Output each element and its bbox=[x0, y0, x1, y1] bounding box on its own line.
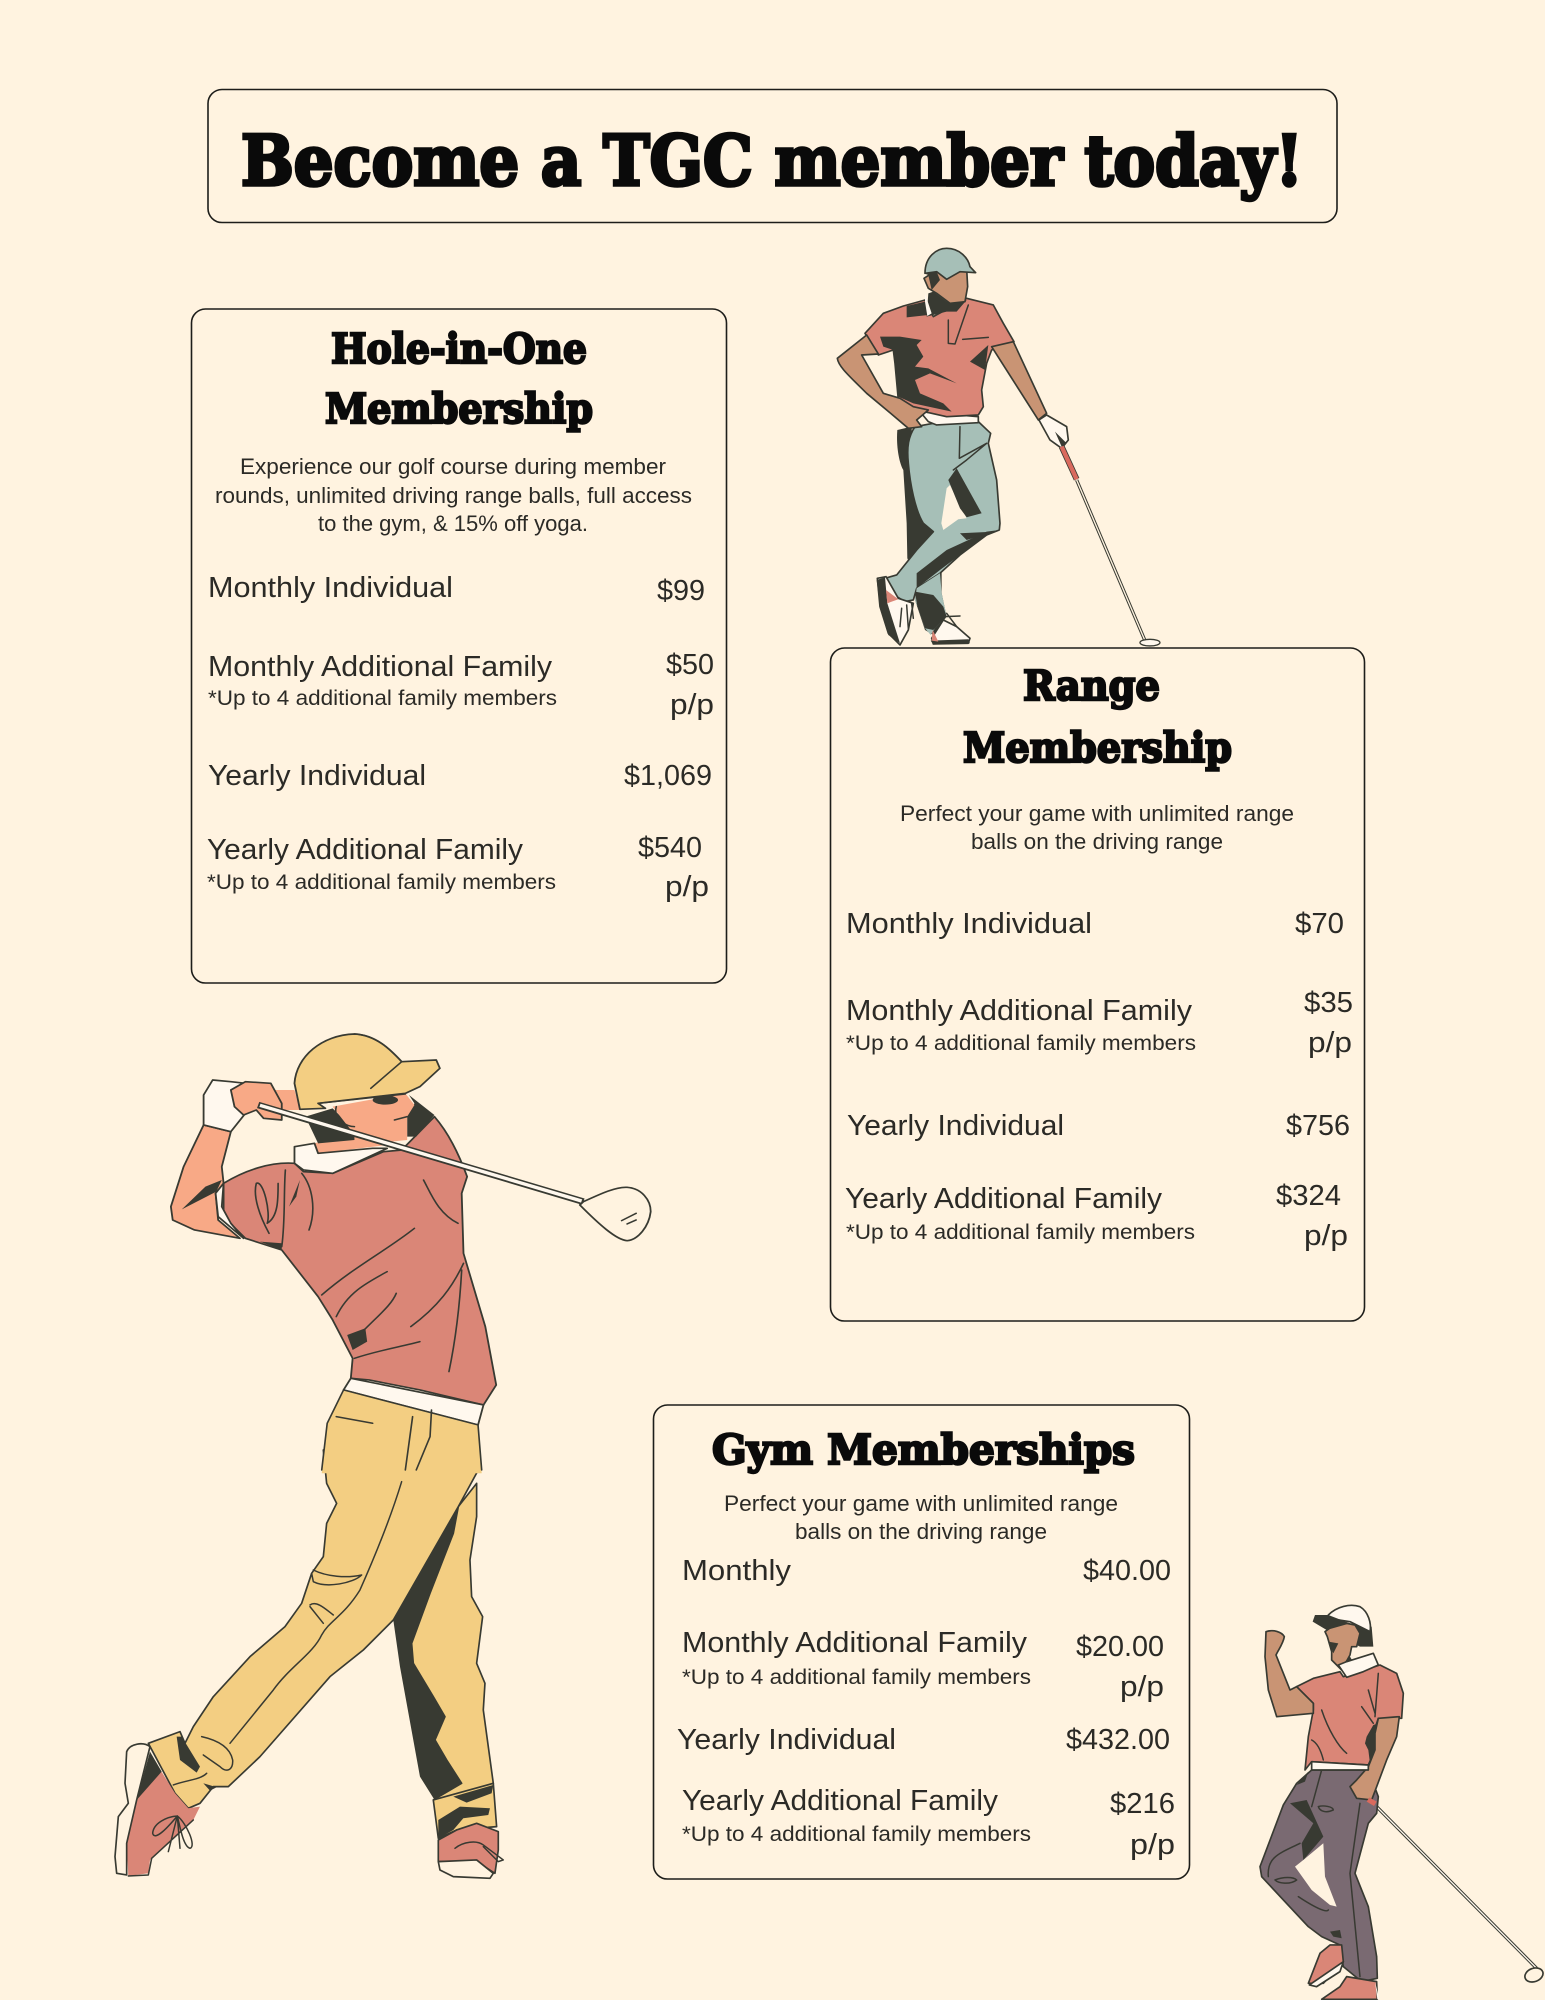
heading: Range Membership bbox=[963, 662, 1232, 772]
description bbox=[215, 454, 692, 536]
price row: yearly additional family bbox=[207, 832, 709, 903]
left shoe bbox=[877, 577, 913, 645]
price row: yearly additional family bbox=[682, 1785, 1175, 1861]
description: Experience our golf course during member bbox=[240, 454, 666, 479]
price row: monthly additional family: $20.00 bbox=[1076, 1631, 1164, 1663]
price row: yearly additional family: Yearly Additional Family bbox=[845, 1183, 1163, 1215]
description bbox=[724, 1491, 1118, 1544]
price row: monthly additional family: Monthly Additional Family bbox=[208, 651, 553, 683]
price row: monthly additional family: Monthly Additional Family bbox=[682, 1627, 1028, 1659]
price row: yearly additional family: p/p bbox=[665, 871, 709, 903]
description: Perfect your game with unlimited range bbox=[724, 1491, 1118, 1516]
price row: monthly additional family: *Up to 4 additional family members bbox=[208, 686, 557, 710]
price row: yearly additional family: $540 bbox=[638, 832, 702, 864]
panel: Gym Memberships bbox=[654, 1405, 1190, 1879]
glove bbox=[1039, 415, 1068, 448]
left shoe bbox=[115, 1744, 200, 1876]
price row: monthly additional family bbox=[208, 649, 714, 721]
shoes bbox=[1308, 1945, 1379, 1999]
shirt bbox=[1297, 1665, 1403, 1770]
price row: monthly additional family: p/p bbox=[1120, 1671, 1164, 1703]
head bbox=[1347, 1623, 1373, 1647]
arms bbox=[1265, 1631, 1313, 1717]
cap bbox=[294, 1034, 440, 1109]
price row: monthly additional family bbox=[846, 987, 1353, 1059]
heading: Hole-in-One Membership bbox=[325, 325, 593, 433]
heading: Hole-in-One Membership: Hole-in-One bbox=[331, 325, 587, 373]
description: balls on the driving range bbox=[795, 1519, 1047, 1544]
heading: Range Membership: Membership bbox=[963, 724, 1232, 772]
price row: monthly additional family: *Up to 4 additional family members bbox=[682, 1665, 1031, 1689]
neck and head bbox=[927, 292, 967, 317]
price row: monthly: $40.00 bbox=[1083, 1555, 1171, 1587]
description bbox=[900, 801, 1294, 854]
price row: yearly individual bbox=[847, 1110, 1350, 1142]
celebrating club bbox=[1373, 1803, 1545, 1984]
price row: monthly additional family: Monthly Additional Family bbox=[846, 995, 1193, 1027]
price row: yearly individual: Yearly Individual bbox=[208, 760, 426, 792]
description: rounds, unlimited driving range balls, full access bbox=[215, 483, 692, 508]
panel: Hole-in-One Membership bbox=[192, 309, 726, 983]
illustration: golfer mid-swing, legs and shoes bbox=[115, 1450, 503, 1878]
price row: monthly bbox=[682, 1555, 1171, 1587]
price row: monthly individual: $99 bbox=[657, 575, 705, 607]
price row: yearly additional family: *Up to 4 additional family members bbox=[846, 1220, 1195, 1244]
description: to the gym, & 15% off yoga. bbox=[318, 511, 588, 536]
price row: yearly additional family: $216 bbox=[1110, 1788, 1175, 1820]
price row: yearly individual: Yearly Individual bbox=[677, 1724, 896, 1756]
right shoe bbox=[438, 1823, 503, 1878]
title banner: Become a TGC member today! bbox=[241, 121, 1303, 202]
belt bbox=[920, 412, 978, 425]
price row: monthly individual: $70 bbox=[1295, 908, 1344, 940]
price row: monthly individual bbox=[846, 908, 1344, 940]
price row: yearly individual: Yearly Individual bbox=[847, 1110, 1064, 1142]
description: Perfect your game with unlimited range bbox=[900, 801, 1294, 826]
price row: monthly individual: Monthly Individual bbox=[846, 908, 1092, 940]
heading: Range Membership: Range bbox=[1023, 662, 1160, 710]
price row: monthly additional family bbox=[682, 1627, 1164, 1703]
collar and neck bbox=[314, 1132, 387, 1153]
illustration: golfer mid-swing, upper body bbox=[171, 1034, 651, 1473]
price row: monthly additional family: p/p bbox=[670, 689, 714, 721]
heading: Hole-in-One Membership: Membership bbox=[325, 385, 593, 433]
price row: monthly additional family: *Up to 4 additional family members bbox=[846, 1031, 1196, 1055]
price row: yearly additional family: Yearly Additional Family bbox=[682, 1785, 999, 1817]
panel: Range Membership bbox=[830, 648, 1364, 1321]
price row: monthly individual: Monthly Individual bbox=[208, 572, 453, 604]
price row: yearly additional family: $324 bbox=[1276, 1180, 1341, 1212]
shirt bbox=[224, 1117, 496, 1405]
price row: yearly individual: $1,069 bbox=[624, 760, 712, 792]
hair and face bbox=[305, 1108, 354, 1143]
price row: yearly additional family bbox=[845, 1180, 1348, 1252]
price row: monthly: Monthly bbox=[682, 1555, 792, 1587]
price row: yearly additional family: p/p bbox=[1130, 1829, 1175, 1861]
price row: monthly additional family: p/p bbox=[1308, 1027, 1352, 1059]
right shoe bbox=[931, 613, 970, 645]
driver club bbox=[258, 1105, 651, 1241]
price row: yearly additional family: *Up to 4 additional family members bbox=[207, 870, 556, 894]
arm bbox=[171, 1125, 240, 1238]
price row: yearly additional family: *Up to 4 additional family members bbox=[682, 1822, 1031, 1846]
price row: monthly additional family: $50 bbox=[666, 649, 714, 681]
description: balls on the driving range bbox=[971, 829, 1223, 854]
illustration: golfer leaning on putter bbox=[837, 248, 1160, 646]
price row: yearly additional family: p/p bbox=[1304, 1220, 1348, 1252]
glove bbox=[204, 1080, 245, 1132]
price row: yearly individual bbox=[208, 760, 712, 792]
price row: monthly additional family: $35 bbox=[1304, 987, 1353, 1019]
illustration: cheering golfer bbox=[1260, 1605, 1545, 1999]
price row: yearly additional family: Yearly Additional Family bbox=[207, 834, 524, 866]
belt bbox=[1312, 1762, 1368, 1770]
price row: yearly individual: $756 bbox=[1286, 1110, 1350, 1142]
heading: Gym Memberships: Gym Memberships bbox=[712, 1426, 1135, 1474]
price row: monthly individual bbox=[208, 572, 705, 607]
putter bbox=[1062, 447, 1160, 646]
title banner bbox=[208, 90, 1337, 222]
price row: yearly individual bbox=[677, 1724, 1170, 1756]
price row: yearly individual: $432.00 bbox=[1066, 1724, 1170, 1756]
belt bbox=[344, 1378, 483, 1425]
